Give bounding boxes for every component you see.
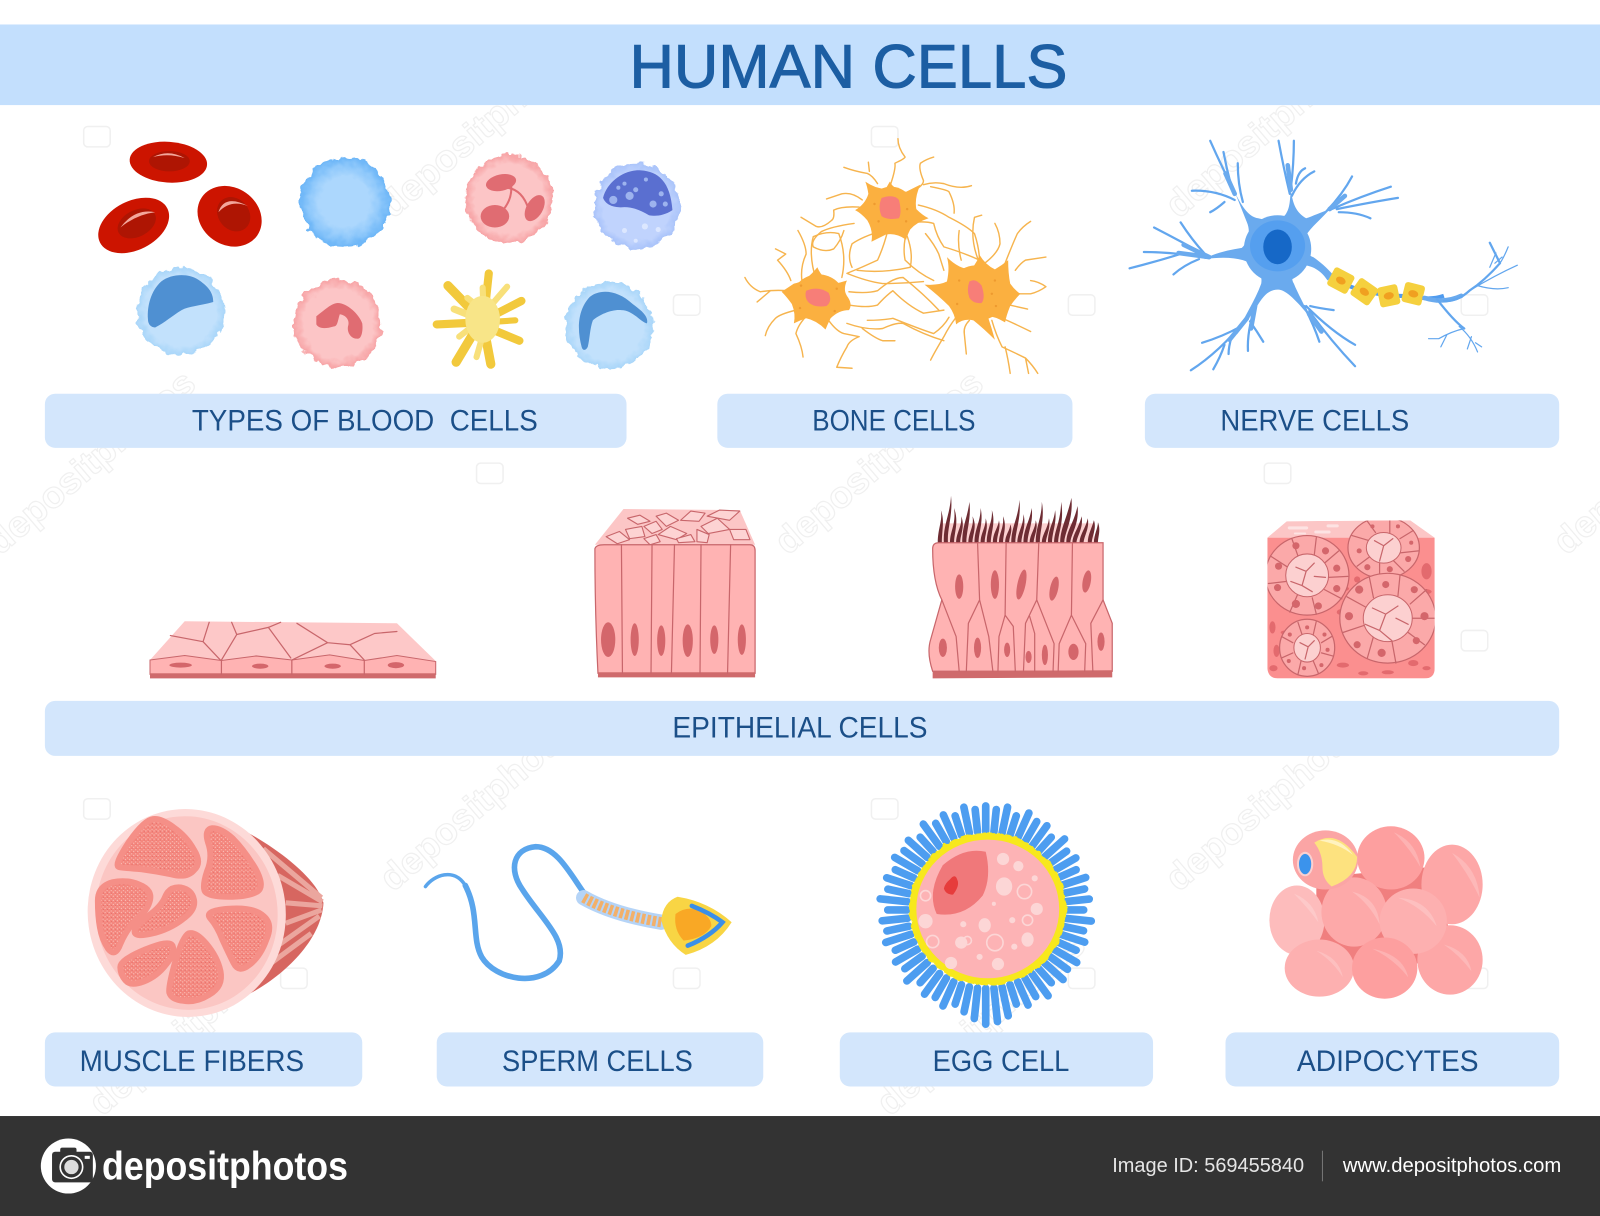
label: muscle fibers: MUSCLE FIBERS [80,1045,304,1078]
muscle cross-section [74,796,299,1030]
panel: epithelial cells [45,496,1559,756]
muscle bundle 7 [169,933,221,1001]
sperm tail [426,847,584,978]
bone cell branches [745,139,1046,373]
icon: basophil [594,163,680,249]
gland: acinus C [1340,573,1436,663]
label: egg cell [840,1032,1153,1086]
icon: eosinophil [294,280,382,367]
panel: blood cells [45,139,680,448]
panel: nerve cells [1130,141,1559,448]
sperm midpiece [584,898,661,922]
axon with myelin sheath [1326,266,1444,308]
label: blood cells: TYPES OF BLOOD CELLS [192,405,538,437]
gland: acinus B [1348,517,1419,578]
muscle bundle 4 [135,887,194,935]
icon: bone cell top [855,182,929,242]
brand name: depositphotos [102,1144,348,1188]
cilia [938,496,1099,543]
icon: platelet [437,273,521,364]
label: bone cells [717,394,1072,448]
nerve cell cytoplasm [1250,220,1305,271]
sperm head [661,897,732,955]
muscle back cone [233,828,323,1002]
icon: glandular epithelium cube [1265,517,1439,680]
icon: squamous epithelium [150,621,436,678]
watermark: depositphotos [868,923,1093,1123]
icon: red blood cell top [128,139,208,185]
icon: red blood cell left [89,186,178,264]
label: sperm cells [437,1032,763,1086]
panel: sperm cells [426,847,763,1086]
icon: blue white blood cell [300,157,390,247]
adipocyte with nucleus and fat droplet [1293,830,1358,890]
label: epithelial cells [45,701,1559,756]
title: HUMAN CELLS [630,33,1067,101]
label: muscle fibers [45,1032,362,1086]
egg yellow membrane [909,832,1066,985]
website: www.depositphotos.com [1342,1155,1561,1177]
muscle bundle 6 [120,943,173,984]
gland: acinus D [1280,619,1335,676]
adipocyte cluster [1269,826,1483,999]
egg corona rays [880,806,1091,1024]
panel: muscle fibers [45,796,362,1086]
icon: bone cell right [924,255,1020,340]
icon: red blood cell right [186,174,274,259]
label: adipocytes: ADIPOCYTES [1297,1045,1479,1078]
icon: lymphocyte left [137,267,224,355]
footer bar [0,1116,1600,1216]
icon: columnar epithelium [595,509,755,677]
egg cytoplasm [916,840,1059,978]
label: bone cells: BONE CELLS [812,405,976,437]
axon terminals [1424,243,1517,352]
nerve cell dendrites [1130,141,1398,370]
label: blood cells [45,394,627,448]
watermark: depositphotos [1157,699,1382,899]
image id: Image ID: 569455840 [1112,1155,1304,1177]
nerve cell nucleus [1263,230,1292,264]
icon: depositphotos logo [41,1138,96,1194]
panel: bone cells [717,139,1072,448]
gland: acinus A [1265,536,1349,615]
watermark: depositphotos [81,923,305,1123]
label: adipocytes [1226,1032,1559,1086]
label: epithelial cells: EPITHELIAL CELLS [672,712,928,745]
watermark: depositphotos [1157,25,1382,225]
watermark: depositphotos [371,699,596,899]
egg nucleolus [944,876,958,895]
nerve cell body [1204,190,1334,335]
muscle bundle 1 [118,819,198,876]
egg nucleus [933,851,988,915]
icon: monocyte [565,282,653,369]
muscle bundle 5 [209,909,269,969]
panel: egg cell [840,806,1153,1086]
label: nerve cells: NERVE CELLS [1220,405,1409,437]
icon: bone cell left [782,267,851,330]
title banner [0,24,1600,105]
muscle bundle 3 [98,881,150,952]
label: nerve cells [1145,394,1559,448]
muscle bundle 2 [204,828,261,897]
label: sperm cells: SPERM CELLS [502,1045,693,1078]
watermark: depositphotos [766,362,991,562]
label: egg cell: EGG CELL [933,1045,1069,1078]
panel: adipocytes [1226,826,1559,1086]
adipocyte backing [1316,867,1459,974]
icon: ciliated pseudostratified epithelium [929,496,1112,678]
watermark: depositphotos [371,25,596,225]
icon: neutrophil [465,155,553,243]
